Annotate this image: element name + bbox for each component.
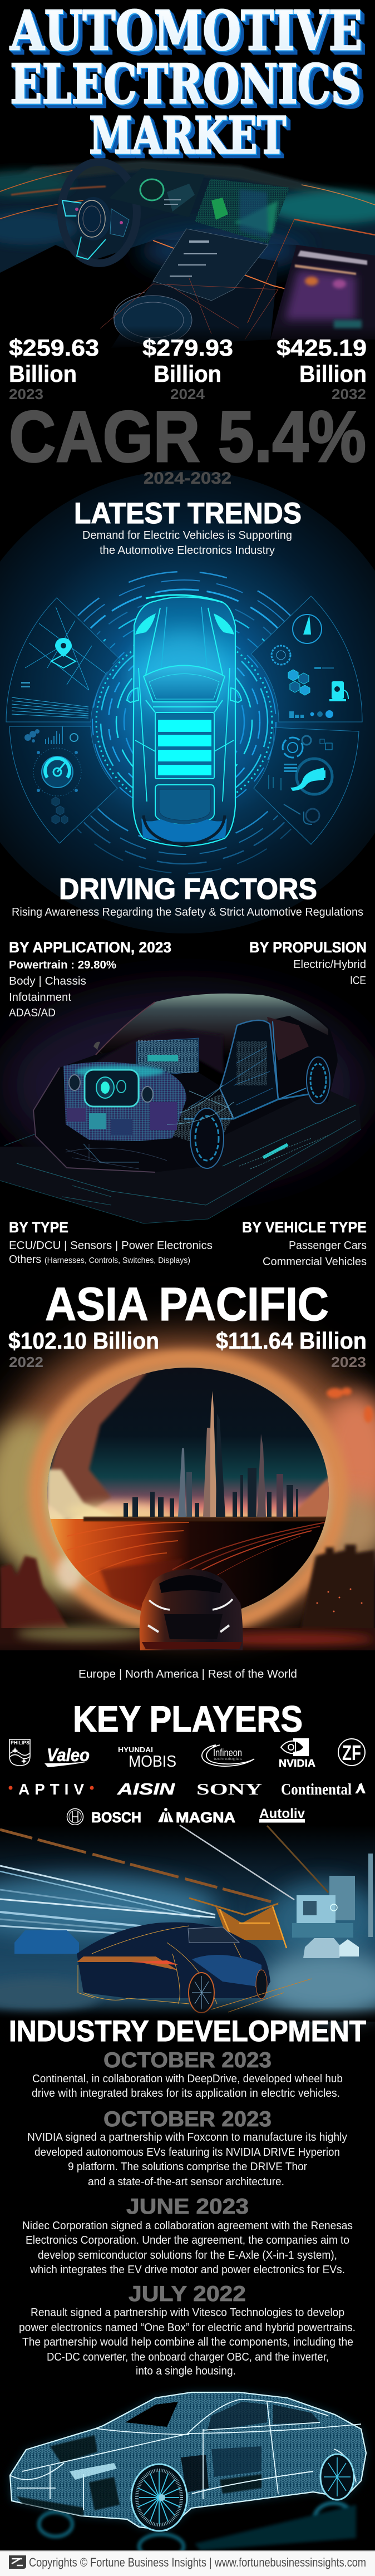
distant city silhouettes	[0, 1545, 375, 1631]
company logos	[9, 1738, 366, 1826]
breakdown: by type: BY TYPE	[9, 1219, 68, 1236]
icon: speedometer	[33, 748, 81, 796]
CAGR figure: 2024-2032	[144, 469, 231, 488]
heading: latest trends: the Automotive Electronics Industry	[100, 544, 275, 557]
platform	[0, 1083, 361, 1223]
development: July 2022 Renault: into a single housing.	[136, 2365, 236, 2377]
logo: Aisin: AISIN	[117, 1781, 175, 1798]
heading: driving factors	[12, 873, 363, 918]
icon: bar chart	[45, 726, 63, 744]
car body	[33, 994, 338, 1172]
body lines	[10, 2400, 361, 2510]
headlight	[70, 2463, 117, 2480]
windshield	[144, 666, 225, 702]
top-view electric car	[127, 595, 241, 846]
battery pack	[155, 712, 214, 779]
development: October 2023 NVIDIA: 9 platform. The solutions comprise the DRIVE Thor	[68, 2161, 307, 2173]
development: October 2023 NVIDIA	[27, 2107, 347, 2188]
development: July 2022 Renault	[19, 2282, 356, 2377]
development: July 2022 Renault: The partnership would help combine all the components, including the	[22, 2336, 353, 2348]
breakdown: by vehicle type: BY VEHICLE TYPE	[242, 1219, 367, 1236]
development: October 2023 NVIDIA: NVIDIA signed a partnership with Foxconn to manufacture its highly	[27, 2131, 347, 2144]
breakdown: by propulsion	[249, 939, 367, 987]
logo: Hyundai Mobis: MOBIS	[129, 1753, 176, 1771]
stat 2023: $259.63	[9, 335, 99, 361]
circuit rings	[77, 571, 292, 874]
icon: EV charging plug	[290, 759, 332, 794]
skyline	[124, 1391, 298, 1517]
logo: Magna: MAGNA	[176, 1809, 235, 1826]
logo: Philips	[9, 1739, 30, 1766]
title	[9, 0, 362, 165]
breakdown: by application	[9, 939, 171, 1019]
planet globe	[45, 1367, 332, 1620]
stat 2024: Billion	[154, 361, 221, 387]
development: July 2022 Renault: Renault signed a partnership with Vitesco Technologies to develop	[31, 2307, 344, 2319]
development: October 2023 Continental	[32, 2048, 343, 2100]
development: June 2023 Nidec: which integrates the EV drive motor and power electronics for EVs.	[29, 2264, 345, 2276]
development: October 2023 Continental: drive with integrated brakes for its application in electric vehicles.	[32, 2087, 340, 2100]
heading: driving factors: DRIVING FACTORS	[59, 873, 317, 906]
development: June 2023 Nidec: Electronics Corporation. Under the agreement, the companies aim to	[26, 2234, 349, 2246]
logo: Continental: Continental	[281, 1781, 352, 1798]
development: June 2023 Nidec	[22, 2195, 353, 2276]
assembly machine	[292, 1854, 373, 1938]
car rear view with orange wiring	[77, 1923, 312, 2013]
regional value 2023: 2023	[331, 1354, 366, 1370]
dashboard screens	[109, 168, 375, 340]
heading: driving factors: Rising Awareness Regarding the Safety & Strict Automotive Regulations	[12, 906, 363, 918]
logo: Autoliv: Autoliv	[259, 1806, 305, 1821]
footer bar	[0, 2550, 375, 2576]
data panel: charging and compass	[251, 596, 362, 722]
heading: key players: KEY PLAYERS	[73, 1698, 303, 1739]
orange robotic gantry	[189, 1898, 287, 1948]
car glow	[10, 2392, 366, 2530]
stat 2032: Billion	[299, 361, 367, 387]
logo: Infineon	[202, 1744, 254, 1766]
logo: Infineon: Infineon	[213, 1747, 242, 1758]
title: MARKET	[89, 106, 286, 165]
wheels	[190, 1057, 330, 1168]
breakdown: by type: Others	[9, 1253, 41, 1266]
logo: ZF	[338, 1739, 365, 1766]
breakdown: by type: (Harnesses, Controls, Switches, Displays)	[45, 1256, 190, 1265]
logo: NVIDIA: NVIDIA	[279, 1758, 315, 1769]
icon: hexagon cluster	[288, 670, 310, 695]
icon: compass	[293, 614, 322, 643]
breakdown: by type: ECU/DCU | Sensors | Power Electronics	[9, 1240, 213, 1252]
breakdown: by application: Powertrain : 29.80%	[9, 959, 116, 971]
breakdown: by vehicle type: Passenger Cars	[289, 1240, 367, 1252]
development: June 2023 Nidec: Nidec Corporation signed a collaboration agreement with the Renesas	[22, 2220, 353, 2232]
stat 2024: 2024	[170, 386, 205, 402]
ceiling beams	[0, 1825, 328, 1934]
parked cars	[14, 1930, 359, 1958]
electric car front view	[140, 1569, 243, 1650]
x-ray car illustration	[0, 991, 367, 1223]
breakdown: by application: ADAS/AD	[9, 1007, 56, 1019]
breakdown: by vehicle type: Commercial Vehicles	[263, 1256, 367, 1268]
electronics module	[63, 1038, 234, 1141]
development: June 2023 Nidec: develop semiconductor solutions for the E-Axle (X-in-1 system),	[38, 2249, 337, 2262]
stat 2032: $425.19	[277, 335, 367, 361]
regional value 2022	[8, 1328, 159, 1370]
breakdown: by application: BY APPLICATION, 2023	[9, 939, 171, 956]
reflection	[39, 2503, 356, 2559]
trends radial halo background	[0, 470, 375, 933]
breakdown: by application: Infotainment	[9, 991, 71, 1004]
other regions: Europe | North America | Rest of the World	[78, 1668, 297, 1680]
icon: location pin	[55, 638, 72, 657]
breakdown: by type	[9, 1219, 213, 1266]
logo: Infineon: technologies	[214, 1758, 242, 1761]
logo: ZF: ZF	[342, 1742, 361, 1765]
development: July 2022 Renault: JULY 2022	[129, 2282, 246, 2306]
heading: latest trends: LATEST TRENDS	[74, 497, 302, 530]
rear glass	[155, 785, 214, 825]
development: October 2023 Continental: OCTOBER 2023	[103, 2048, 272, 2072]
mirrors	[127, 688, 139, 702]
development: October 2023 NVIDIA: and a state-of-the-art sensor architecture.	[88, 2176, 284, 2188]
stat 2024	[142, 335, 233, 402]
logo: Hyundai Mobis	[118, 1746, 176, 1771]
logo: Valeo: Valeo	[47, 1745, 90, 1765]
icon: charging station	[329, 681, 348, 701]
development: July 2022 Renault: DC-DC converter, the onboard charger OBC, and the inverter,	[47, 2351, 329, 2363]
breakdown: by application: Body | Chassis	[9, 975, 86, 987]
heading: latest trends	[74, 497, 302, 557]
regional value 2022: $102.10 Billion	[8, 1328, 159, 1354]
icon: car body outline	[133, 597, 235, 846]
stat 2023: Billion	[9, 361, 77, 387]
stat 2032	[277, 335, 367, 402]
stat 2032: 2032	[332, 386, 366, 402]
car body	[10, 2392, 366, 2530]
wheels	[131, 2454, 354, 2531]
wire mesh	[10, 2392, 366, 2530]
heading: latest trends: Demand for Electric Vehicles is Supporting	[82, 529, 292, 542]
development: June 2023 Nidec: JUNE 2023	[126, 2195, 249, 2219]
data panel: navigation map	[6, 598, 120, 722]
windows	[125, 2402, 178, 2427]
development: October 2023 NVIDIA: OCTOBER 2023	[103, 2107, 272, 2131]
regional value 2023	[216, 1328, 367, 1370]
stat 2023: 2023	[9, 386, 43, 402]
connected car circuit graphic	[6, 571, 362, 873]
circular floor dial	[100, 278, 278, 345]
logo: Philips: PHILIPS	[11, 1740, 29, 1746]
regional value 2022: 2022	[9, 1354, 43, 1370]
breakdown: by propulsion: Electric/Hybrid	[293, 958, 366, 971]
logo: Bosch	[67, 1809, 141, 1826]
wireframe car	[10, 2392, 366, 2559]
data panel: EV plug	[254, 727, 359, 844]
regional value 2023: $111.64 Billion	[216, 1328, 367, 1354]
development: October 2023 NVIDIA: developed autonomous EVs featuring its NVIDIA DRIVE Hyperion	[34, 2146, 340, 2159]
logo: Magna	[158, 1808, 235, 1826]
dark voids in body	[17, 2435, 261, 2516]
logo: Hyundai Mobis: HYUNDAI	[118, 1746, 153, 1754]
steering wheel	[61, 162, 137, 263]
market value stats	[9, 335, 367, 402]
development: October 2023 Continental: Continental, in collaboration with DeepDrive, developed wheel hub	[32, 2073, 343, 2085]
breakdown: by propulsion: BY PROPULSION	[249, 939, 367, 956]
Asia Pacific planet scene	[0, 1308, 375, 1656]
stat 2023	[9, 335, 99, 402]
dashboard interior illustration	[0, 160, 375, 359]
icon: Fortune Business Insights logo	[9, 2555, 26, 2569]
factory scene with wired car	[0, 1825, 375, 2022]
orange ambient lines	[0, 169, 375, 323]
breakdown: by propulsion: ICE	[350, 975, 366, 987]
logo: Bosch: BOSCH	[91, 1809, 141, 1826]
logo: Sony: SONY	[196, 1781, 262, 1798]
logo: NVIDIA	[279, 1738, 315, 1769]
stat 2024: $279.93	[142, 335, 233, 361]
logo: Aptiv: APTIV	[18, 1781, 84, 1798]
breakdown: by vehicle type	[242, 1219, 367, 1268]
data panel: speed gauge	[9, 726, 117, 843]
heading: Asia Pacific: ASIA PACIFIC	[45, 1278, 329, 1330]
development: July 2022 Renault: power electronics named “One Box” for electric and hybrid powertrains.	[19, 2322, 356, 2334]
